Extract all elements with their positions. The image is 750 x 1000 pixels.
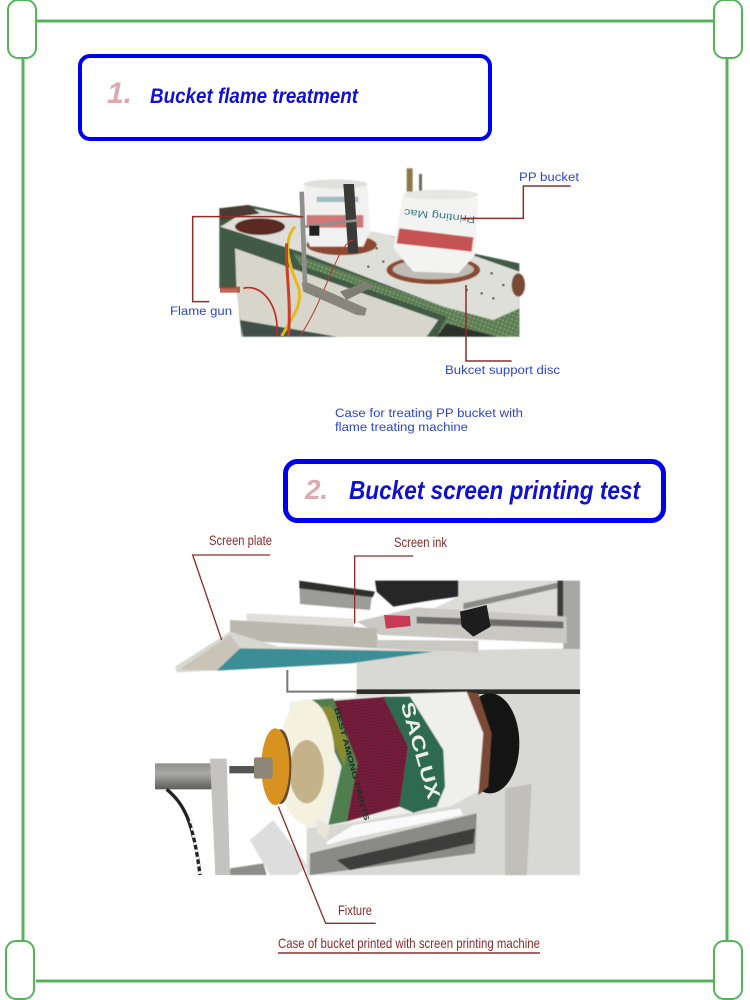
caption: screen printing case: Case of bucket printed with screen printing machine [278, 935, 540, 951]
printed bucket [278, 692, 492, 845]
heading: bucket screen printing test: Bucket screen printing test [349, 475, 641, 505]
bucket print text: BEST AMONG PAINTS [332, 707, 371, 822]
rear drum [461, 693, 519, 793]
icon: front PP bucket [387, 168, 480, 284]
heading: bucket screen printing test: 2. [304, 474, 328, 505]
bucket print text [332, 699, 445, 822]
icon: rear PP bucket [303, 179, 377, 255]
label: PP bucket: PP bucket [519, 172, 580, 184]
cable [167, 789, 200, 875]
heading: bucket screen printing test [286, 462, 664, 520]
lower slide rail [230, 784, 532, 875]
machine background [299, 581, 580, 875]
heading: bucket flame treatment [80, 56, 490, 139]
label: screen plate: Screen plate [209, 532, 272, 548]
caption: flame treating case: flame treating machine [335, 422, 468, 434]
heading: bucket flame treatment: Bucket flame treatment [150, 85, 359, 108]
label: bucket support disc: Bukcet support disc [445, 365, 560, 377]
caption: flame treating case [335, 408, 523, 434]
photo: flame treating machine [193, 168, 571, 361]
red screen ink bottle [384, 615, 411, 629]
photo: screen printing machine [155, 555, 580, 923]
machine body [219, 205, 525, 337]
leader lines [193, 555, 413, 923]
label: screen ink: Screen ink [394, 534, 448, 550]
label: fixture: Fixture [338, 902, 372, 918]
surface bolt holes [367, 247, 505, 300]
text on buckets: Printing Mac [403, 206, 476, 224]
bucket print text: SACLUX [397, 699, 445, 802]
bracket and rail [287, 670, 580, 692]
orange fixture disc [261, 728, 291, 805]
support rod and upright [155, 757, 273, 875]
label: flame gun: Flame gun [170, 306, 232, 318]
leader lines [193, 186, 571, 361]
screen plate [175, 613, 478, 672]
heading: bucket flame treatment: 1. [107, 77, 132, 110]
black knob [460, 605, 491, 637]
caption: flame treating case: Case for treating PP bucket with [335, 408, 523, 420]
flame gun and hoses [220, 184, 373, 336]
